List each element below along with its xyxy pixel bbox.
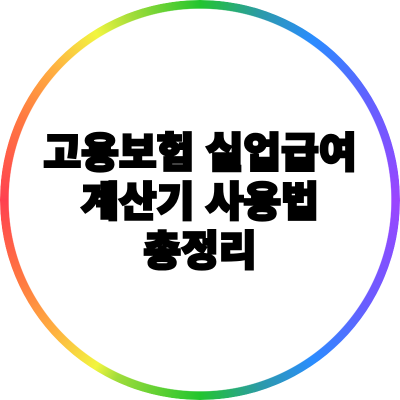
- title: [43, 130, 357, 274]
- title: 계산기 사용법: [81, 179, 319, 225]
- title: 고용보험 실업급여: [43, 130, 357, 176]
- title: 총정리: [143, 228, 257, 274]
